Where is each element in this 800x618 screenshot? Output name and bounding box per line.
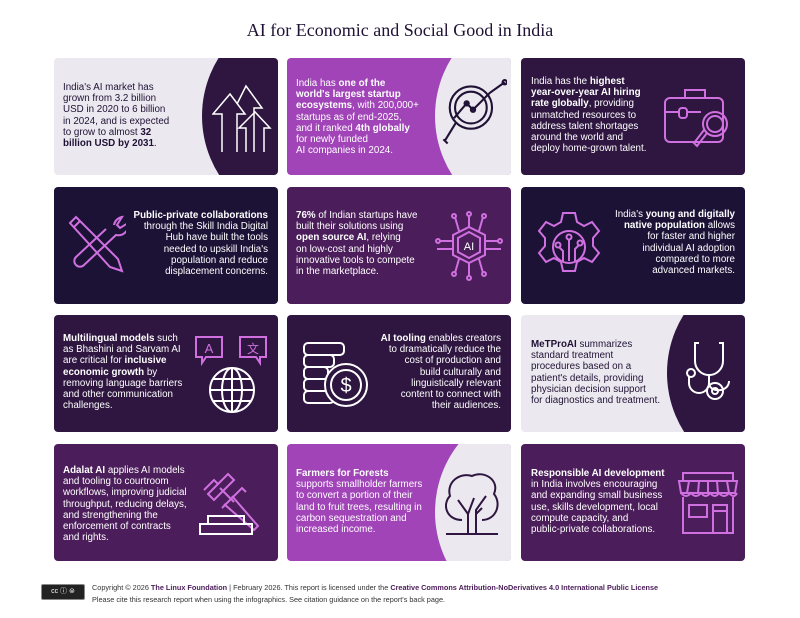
text: public-private: through the Skill India Digital: [144, 221, 268, 232]
text: AI market: billion USD by 2031.: [63, 138, 157, 149]
text: hiring: year-over-year AI hiring: [531, 87, 641, 98]
text: startups: India has one of the: [296, 78, 385, 89]
text: Adalat: Adalat AI applies AI models: [63, 465, 185, 476]
panel: open source: [287, 187, 511, 304]
text: Adalat: and strengthening the: [63, 510, 158, 521]
text: startups: and it ranked 4th globally: [296, 123, 410, 134]
text: hiring: address talent shortages: [531, 121, 638, 132]
text: hiring: India has the highest: [531, 76, 625, 87]
text: startups: world's largest startup: [296, 89, 401, 100]
text: public-private: population and reduce: [171, 255, 268, 266]
text: AI tooling: to dramatically reduce the: [389, 344, 501, 355]
icon: briefcase: [664, 89, 728, 148]
text: young population: advanced markets.: [652, 265, 735, 276]
icon: translate globe: A: [205, 341, 214, 356]
text: farmers: [296, 468, 422, 535]
text: AI tooling: linguistically relevant: [411, 378, 501, 389]
text: AI tooling: [380, 333, 501, 411]
text: AI tooling: content to connect with: [401, 389, 501, 400]
text: MeTProAI: standard treatment: [531, 350, 613, 361]
icon: AI chip: AI: [464, 241, 474, 253]
text: young population: compared to more: [656, 254, 735, 265]
text: farmers: carbon sequestration and: [296, 513, 407, 524]
text: Adalat: and tooling to courtroom: [63, 476, 169, 487]
text: open source: innovative tools to compete: [296, 255, 415, 266]
text: AI market: to grow to almost 32: [63, 127, 151, 138]
text: Adalat: throughput, reducing delays,: [63, 499, 187, 510]
icon: coins: $: [340, 375, 352, 397]
text: hiring: rate globally, providing: [531, 98, 634, 109]
panel: public-private: [54, 187, 278, 304]
text: multilingual: are critical for inclusive: [63, 355, 166, 366]
text: startups: AI companies in 2024.: [296, 145, 393, 156]
text: public-private: [134, 210, 268, 277]
icon: shop: [678, 472, 738, 534]
text: hiring: around the world and: [531, 132, 623, 143]
text: multilingual: challenges.: [63, 400, 113, 411]
panel: Adalat AI: [54, 444, 278, 561]
text: open source: built their solutions using: [296, 221, 403, 232]
text: open source: [296, 210, 417, 277]
text: public-private: Public-private collaborations: [134, 210, 268, 221]
text: multilingual: [63, 333, 182, 411]
text: Adalat: and rights.: [63, 532, 109, 543]
icon: tools: [68, 216, 126, 273]
text: responsible: Responsible AI development: [531, 468, 665, 479]
text: multilingual: economic growth by: [63, 367, 157, 378]
panel: Farmers for Forests: [287, 444, 511, 561]
text: young population: India's young and digitally: [615, 209, 735, 220]
text: responsible: use, skills development, local: [531, 502, 658, 513]
text: startups: [296, 78, 419, 156]
text: young population: individual AI adoption: [642, 243, 735, 254]
text: AI tooling: build culturally and: [420, 367, 501, 378]
text: responsible: and expanding small business: [531, 490, 662, 501]
text: AI tooling: cost of production and: [405, 355, 501, 366]
text: young population: native population allows: [624, 220, 735, 231]
text: public-private: displacement concerns.: [165, 266, 268, 277]
text: AI tooling: their audiences.: [432, 400, 501, 411]
panel: young population: [521, 187, 745, 304]
icon: CC license badge: cc ⓘ ⊜: [51, 588, 75, 595]
text: MeTProAI: procedures based on a: [531, 361, 631, 372]
text: young population: [615, 209, 735, 276]
text: AI market: India's AI market has: [63, 82, 154, 93]
text: farmers: supports smallholder farmers: [296, 479, 422, 490]
text: Adalat: enforcement of contracts: [63, 521, 171, 532]
icon: gear: [538, 212, 600, 272]
footer: copyright: Copyright © 2026 The Linux Foundation | February 2026. This report is licensed under the Creative Commons Attribution-NoDerivatives 4.0 International Public License: [92, 583, 658, 592]
text: multilingual: removing language barriers: [63, 378, 182, 389]
text: MeTProAI: [531, 339, 660, 406]
text: AI market: grown from 3.2 billion: [63, 93, 156, 104]
panel: Responsible AI: [521, 444, 745, 561]
text: responsible: compute capacity, and: [531, 513, 628, 524]
text: farmers: Farmers for Forests: [296, 468, 389, 479]
text: startups: for newly funded: [296, 134, 368, 145]
text: MeTProAI: MeTProAI summarizes: [531, 339, 632, 350]
text: Adalat: [63, 465, 187, 543]
text: responsible: in India involves encouraging: [531, 479, 657, 490]
footer: citation: Please cite this research report when using the infographics. See citation guidance on the report's back page.: [92, 595, 445, 604]
text: farmers: increased income.: [296, 524, 376, 535]
text: startups: ecosystems, with 200,000+: [296, 100, 419, 111]
text: multilingual: as Bhashini and Sarvam AI: [63, 344, 181, 355]
icon: magnifier chart: [442, 79, 507, 144]
icon: arrows up: [212, 84, 272, 152]
title: AI for Economic and Social Good in India: [247, 20, 553, 40]
icon: gavel: [199, 472, 260, 535]
panel: AI tooling: [287, 315, 511, 432]
panel: multilingual: [54, 315, 278, 432]
panel: AI market: [54, 58, 278, 175]
text: open source: open source AI, relying: [296, 232, 401, 243]
text: hiring: unmatched resources to: [531, 110, 636, 121]
text: responsible: [531, 468, 665, 535]
icon: CC license badge: [41, 584, 85, 600]
text: startups: startups as of end-2025,: [296, 112, 402, 123]
text: farmers: land to fruit trees, resulting in: [296, 502, 422, 513]
icon: tree: [445, 473, 499, 535]
text: farmers: to convert a portion of their: [296, 490, 413, 501]
panel: startup ecosystems: [287, 58, 511, 175]
icon: stethoscope: [686, 342, 730, 400]
text: multilingual: and other communication: [63, 389, 173, 400]
text: public-private: needed to upskill India's: [164, 244, 268, 255]
text: young population: for faster and higher: [647, 231, 735, 242]
icon: coins: [303, 342, 368, 407]
text: open source: 76% of Indian startups have: [296, 210, 417, 221]
text: responsible: public-private collaborations.: [531, 524, 655, 535]
text: multilingual: Multilingual models such: [63, 333, 178, 344]
text: public-private: Hub have built the tools: [166, 232, 268, 243]
icon: translate globe: 文: [247, 340, 259, 357]
text: AI tooling: AI tooling enables creators: [381, 333, 501, 344]
text: AI market: in 2024, and is expected: [63, 116, 169, 127]
text: hiring: [531, 76, 646, 154]
text: MeTProAI: patient's details, providing: [531, 373, 643, 384]
text: open source: on low-cost and highly: [296, 244, 393, 255]
text: AI market: [63, 82, 169, 149]
text: MeTProAI: for diagnostics and treatment.: [531, 395, 660, 406]
icon: AI chip: [435, 211, 503, 281]
text: hiring: deploy home-grown talent.: [531, 143, 646, 154]
panel: hiring rate: [521, 58, 745, 175]
text: MeTProAI: physician decision support: [531, 384, 646, 395]
panel: MeTProAI: [521, 315, 745, 432]
icon: translate globe: [195, 336, 267, 413]
text: open source: in the marketplace.: [296, 266, 379, 277]
text: AI market: USD in 2020 to 6 billion: [63, 104, 165, 115]
text: Adalat: workflows, improving judicial: [63, 487, 187, 498]
